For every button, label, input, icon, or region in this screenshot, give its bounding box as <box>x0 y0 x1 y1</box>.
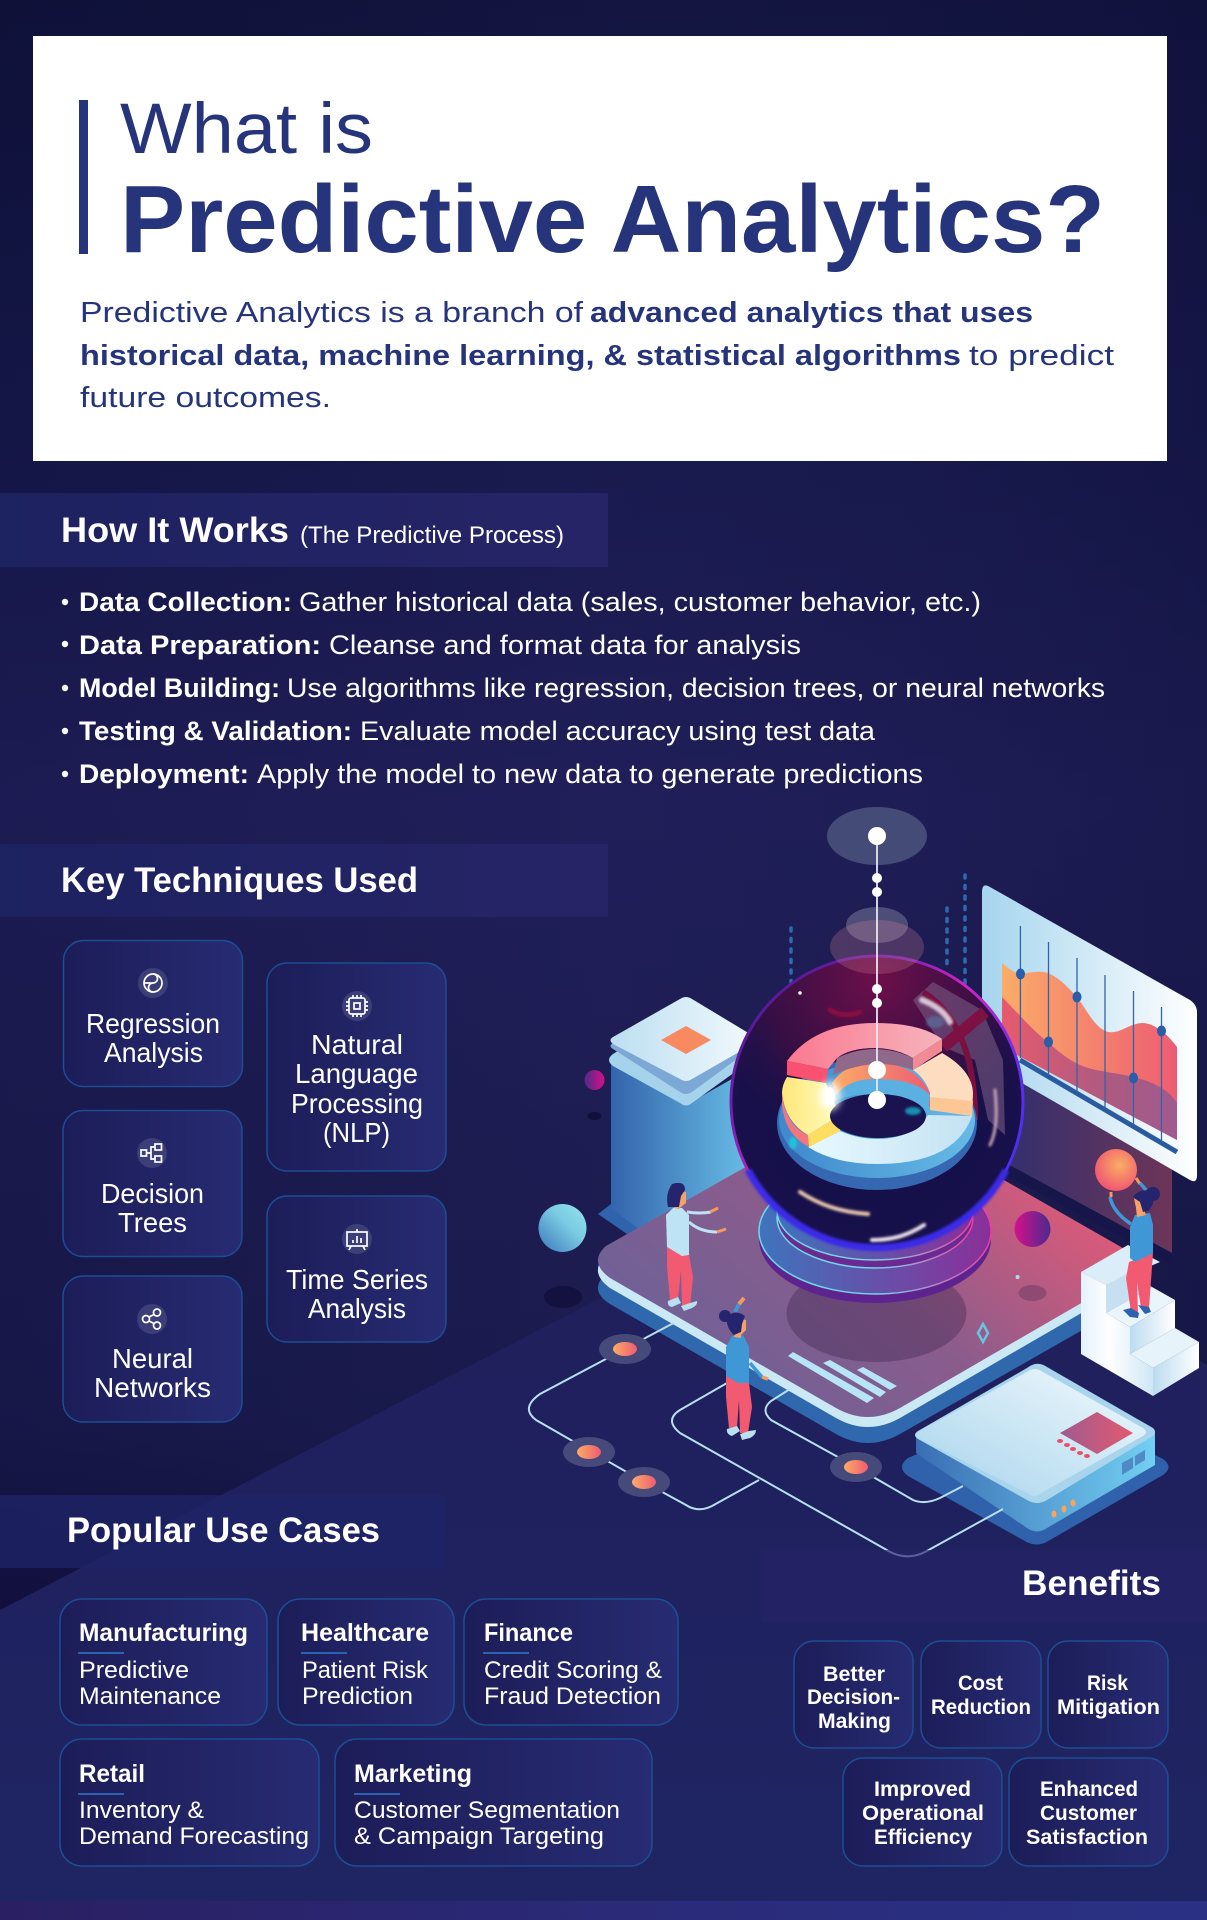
process list: Model Building: <box>79 673 280 703</box>
person front <box>719 1298 768 1440</box>
card: retail: Retail <box>79 1760 145 1788</box>
person left <box>666 1183 726 1311</box>
heading: benefits: Benefits <box>1022 1564 1161 1603</box>
intro paragraph: future outcomes. <box>80 382 331 414</box>
card: time series analysis: Time Series <box>286 1264 428 1295</box>
title line one: What is <box>120 90 373 169</box>
card: better decision-making: Decision- <box>807 1685 900 1709</box>
chart panel <box>982 885 1197 1181</box>
dotted lines <box>791 875 965 984</box>
card: manufacturing: Manufacturing <box>79 1619 248 1647</box>
heading: benefits <box>762 1550 1207 1623</box>
card: enhanced customer satisfaction <box>1009 1758 1168 1866</box>
card: risk mitigation: Risk <box>1087 1671 1128 1695</box>
intro paragraph: to predict <box>969 340 1114 372</box>
heading: key techniques <box>0 844 608 917</box>
card: healthcare: Healthcare <box>301 1619 429 1647</box>
card: retail <box>60 1739 319 1866</box>
glow highlights <box>800 1000 996 1240</box>
beam and nodes <box>827 807 927 1109</box>
process list: Apply the model to new data to generate predictions <box>257 759 923 789</box>
card: improved operational efficiency <box>843 1758 1002 1866</box>
platform <box>598 1168 1138 1443</box>
crystal ball <box>730 955 1024 1249</box>
card: cost reduction: Reduction <box>931 1695 1031 1719</box>
card: healthcare: Prediction <box>302 1683 413 1710</box>
card: enhanced customer satisfaction: Satisfaction <box>1026 1825 1148 1849</box>
wall under chart <box>982 1040 1172 1253</box>
isometric illustration <box>529 807 1199 1556</box>
card: natural language processing: Language <box>295 1058 418 1089</box>
heading: key techniques: Key Techniques Used <box>61 861 418 900</box>
card: natural language processing: (NLP) <box>323 1117 390 1148</box>
card: regression analysis: Analysis <box>104 1037 203 1068</box>
card: marketing <box>335 1739 652 1866</box>
card: improved operational efficiency: Efficiency <box>874 1825 972 1849</box>
card: better decision-making: Better <box>823 1662 886 1686</box>
card: decision trees: Trees <box>118 1207 187 1238</box>
process list: Cleanse and format data for analysis <box>329 630 801 660</box>
intro paragraph: Predictive Analytics is a branch of <box>80 297 584 329</box>
stairs <box>1081 1245 1199 1396</box>
reflection <box>913 982 1005 1135</box>
process list: Use algorithms like regression, decision trees, or neural networks <box>287 673 1105 703</box>
intro paragraph: advanced analytics that uses <box>590 297 1033 329</box>
card: risk mitigation: Mitigation <box>1057 1695 1160 1719</box>
heading: popular use cases <box>0 1495 445 1568</box>
card: retail: Inventory & <box>79 1797 204 1824</box>
card: cost reduction: Cost <box>958 1671 1003 1695</box>
card: manufacturing: Maintenance <box>79 1683 221 1710</box>
process list: Data Collection: <box>79 587 292 617</box>
technique cards <box>63 940 446 1422</box>
card: marketing: Customer Segmentation <box>354 1797 620 1824</box>
heading: how it works: How It Works <box>61 511 289 550</box>
person right with ball <box>1095 1149 1160 1318</box>
process list: Testing & Validation: <box>79 716 352 746</box>
intro paragraph <box>80 297 1114 414</box>
card: natural language processing: Natural <box>311 1029 403 1060</box>
process list: Deployment: <box>79 759 249 789</box>
intro paragraph: historical data, machine learning, & statistical algorithms <box>80 340 961 372</box>
donut chart <box>777 1023 977 1190</box>
card: manufacturing: Predictive <box>79 1657 189 1684</box>
card: better decision-making <box>794 1641 913 1748</box>
card: time series analysis: Analysis <box>308 1293 406 1324</box>
card: manufacturing <box>60 1599 267 1725</box>
card: improved operational efficiency: Operational <box>862 1801 984 1825</box>
card: finance <box>464 1599 678 1725</box>
title line two: Predictive Analytics? <box>120 166 1105 273</box>
card: finance: Finance <box>484 1619 573 1647</box>
circuit nodes <box>563 1334 882 1497</box>
card: enhanced customer satisfaction: Customer <box>1040 1801 1138 1825</box>
card: cost reduction <box>921 1641 1041 1748</box>
process list: Data Preparation: <box>79 630 321 660</box>
glass rim <box>731 956 1023 1248</box>
card: enhanced customer satisfaction: Enhanced <box>1040 1777 1138 1801</box>
floating orbs <box>538 1070 604 1308</box>
pedestal <box>759 1162 991 1303</box>
card: neural networks: Neural <box>112 1343 193 1374</box>
data column <box>598 997 760 1280</box>
card: finance: Fraud Detection <box>484 1683 661 1710</box>
heading: popular use cases: Popular Use Cases <box>67 1511 380 1550</box>
card: marketing: Marketing <box>354 1760 472 1788</box>
card: marketing: & Campaign Targeting <box>354 1823 604 1850</box>
card: natural language processing: Processing <box>291 1088 423 1119</box>
card: risk mitigation <box>1048 1641 1168 1748</box>
heading: how it works <box>0 493 608 567</box>
card: finance: Credit Scoring & <box>484 1657 662 1684</box>
card: neural networks <box>63 1276 242 1422</box>
area chart <box>1002 963 1177 1140</box>
card: better decision-making: Making <box>818 1709 891 1733</box>
process list: Gather historical data (sales, customer behavior, etc.) <box>299 587 981 617</box>
card: natural language processing <box>267 963 446 1171</box>
benefit cards <box>794 1641 1168 1866</box>
card: time series analysis <box>267 1196 446 1342</box>
device box <box>902 1364 1168 1544</box>
process list: Evaluate model accuracy using test data <box>360 716 876 746</box>
card: healthcare <box>278 1599 454 1725</box>
card: regression analysis <box>64 940 242 1086</box>
card: healthcare: Patient Risk <box>302 1657 429 1684</box>
card: retail: Demand Forecasting <box>79 1823 309 1850</box>
card: decision trees: Decision <box>101 1178 204 1209</box>
card: decision trees <box>63 1110 242 1256</box>
use case cards <box>60 1599 678 1866</box>
circuit wires <box>529 1323 1003 1556</box>
heading: how it works: (The Predictive Process) <box>300 522 564 549</box>
header panel <box>33 36 1167 461</box>
process list <box>62 587 1105 789</box>
card: neural networks: Networks <box>94 1372 211 1403</box>
card: regression analysis: Regression <box>86 1008 220 1039</box>
card: improved operational efficiency: Improved <box>874 1777 971 1801</box>
